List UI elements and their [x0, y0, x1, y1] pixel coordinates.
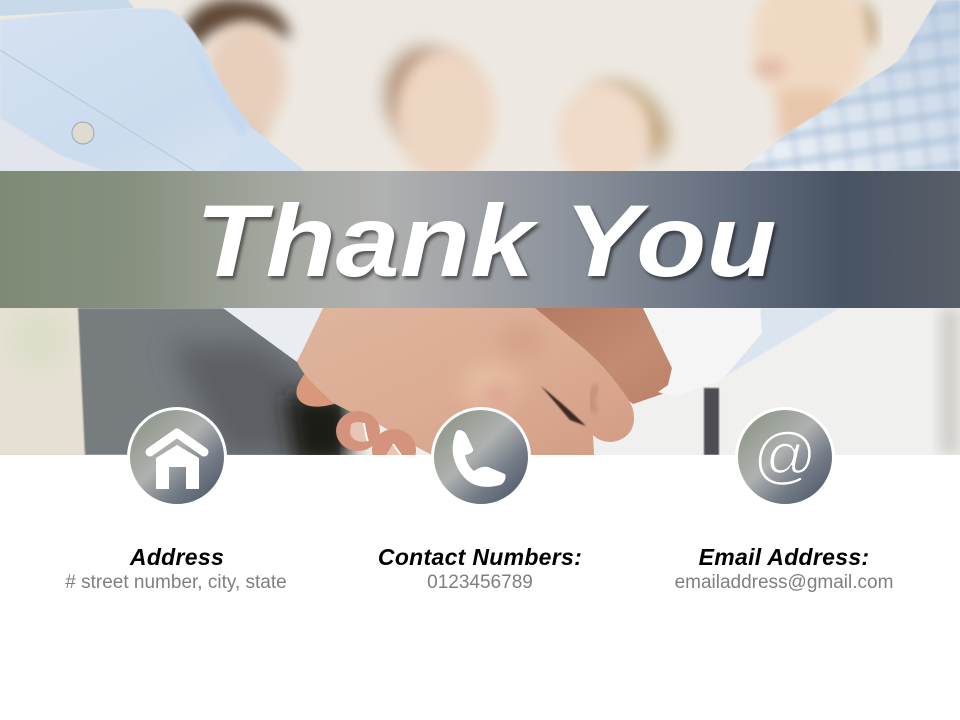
blurred colleagues	[183, 0, 876, 187]
email block	[675, 544, 893, 593]
address block	[65, 544, 287, 593]
icon: at sign	[735, 407, 835, 504]
lower background: suit and shirt	[0, 308, 960, 465]
far hand	[533, 308, 672, 404]
address block: # street number, city, state	[65, 572, 287, 593]
address block: Address	[130, 544, 224, 570]
photo: handshake with blurred colleagues	[0, 0, 960, 455]
contact numbers block	[378, 544, 582, 593]
near shirt cuff	[223, 308, 323, 362]
right shirt sleeve	[730, 0, 960, 171]
clasped hands	[296, 308, 634, 471]
icon: phone	[431, 407, 531, 504]
right shirt cuff	[643, 308, 840, 397]
banner	[0, 171, 960, 308]
wall background	[0, 0, 960, 171]
email block: emailaddress@gmail.com	[675, 572, 893, 593]
icon: house	[127, 407, 227, 504]
contact numbers block: 0123456789	[427, 572, 533, 593]
contact numbers block: Contact Numbers:	[378, 544, 582, 570]
title: Thank You	[195, 184, 777, 298]
email block: Email Address:	[699, 544, 869, 570]
left shirt sleeve	[0, 0, 305, 171]
icon: at sign: @	[753, 421, 817, 491]
